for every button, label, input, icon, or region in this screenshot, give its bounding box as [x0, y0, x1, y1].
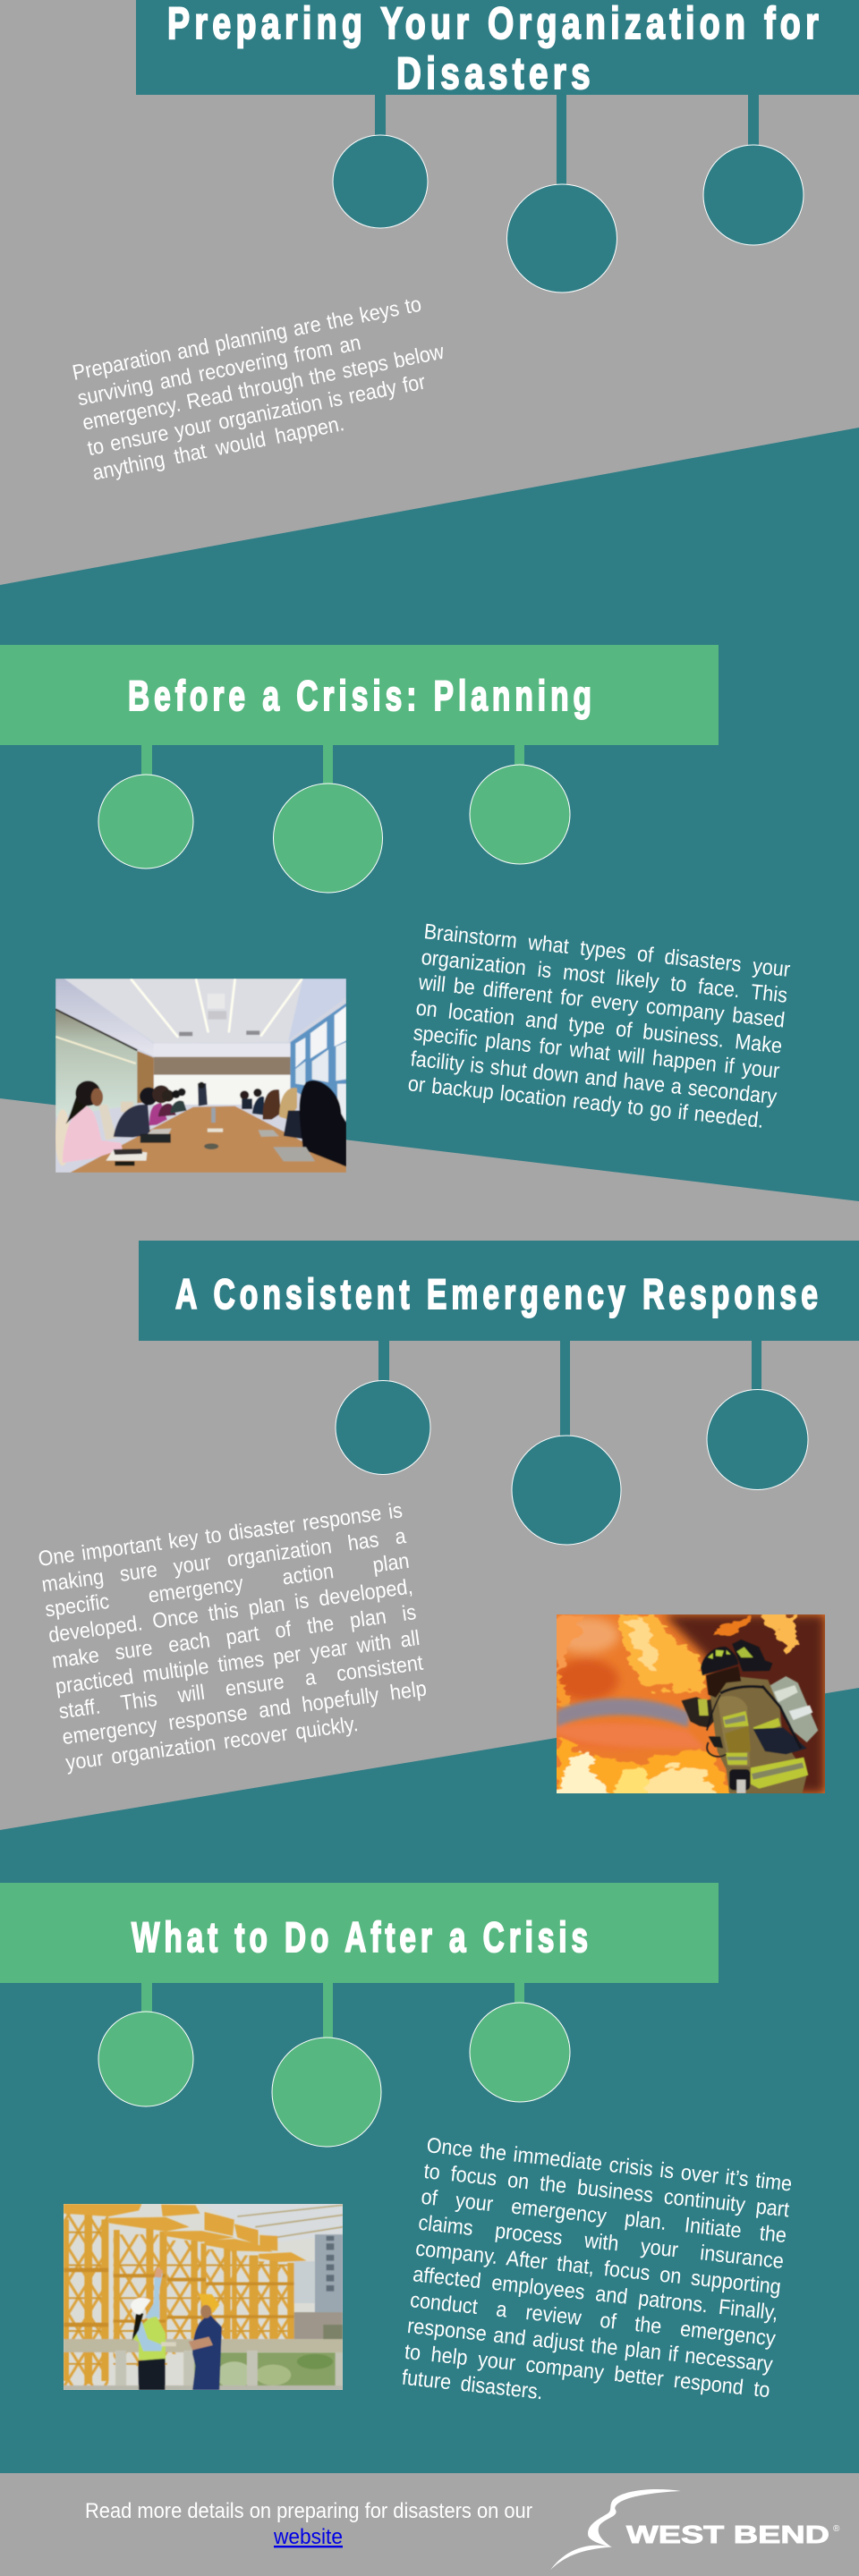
text: to focus on the business continuity part	[422, 2159, 790, 2222]
section: title banner	[136, 0, 859, 292]
text: make sure each part of the plan is	[50, 1600, 418, 1674]
text: conduct a review of the emergency	[409, 2288, 777, 2351]
text: or backup location ready to go if needed.	[407, 1072, 765, 1133]
hanging circles	[336, 1341, 808, 1545]
text: Preparation and planning are the keys to	[71, 292, 423, 386]
hanging circles	[98, 1983, 570, 2147]
text: surviving and recovering from an	[75, 330, 363, 411]
text: will be different for every company based	[418, 970, 786, 1033]
text block: after a crisis	[401, 2133, 793, 2404]
section: before a crisis banner	[0, 645, 719, 893]
text: anything that would happen.	[90, 411, 346, 486]
section: consistent response banner	[139, 1241, 859, 1545]
text: response and adjust the plan if necessary	[406, 2314, 774, 2377]
photo: construction workers at scaffolding	[64, 2204, 343, 2390]
text: specific plans for what will happen if your	[412, 1021, 780, 1083]
logo wordmark: WEST BEND	[626, 2521, 829, 2548]
text: making sure your organization has a	[40, 1524, 407, 1597]
text block: consistent response	[37, 1498, 428, 1775]
text: Once the immediate crisis is over it’s time	[425, 2133, 793, 2197]
text: emergency response and hopefully help	[61, 1676, 428, 1750]
text: affected employees and patrons. Finally,	[412, 2262, 779, 2326]
footer text: Read more details on preparing for disasters on our	[85, 2499, 532, 2523]
heading: main title line 2: Disasters	[396, 48, 595, 98]
text: emergency. Read through the steps below	[81, 340, 446, 436]
footer band	[0, 2473, 859, 2576]
text: on location and type of business. Make	[415, 996, 783, 1058]
footer link: website	[273, 2525, 343, 2549]
heading: after a crisis: What to Do After a Crisis	[132, 1913, 592, 1961]
text: your organization recover quickly.	[64, 1712, 360, 1775]
heading: before a crisis: Before a Crisis: Planning	[128, 672, 596, 719]
text: developed. Once this plan is developed,	[47, 1575, 414, 1648]
text: to ensure your organization is ready for	[85, 369, 428, 461]
text: staff. This will ensure a consistent	[57, 1651, 424, 1724]
hanging circles	[333, 95, 804, 292]
text: facility is shut down and have a secondary	[410, 1046, 778, 1109]
text: One important key to disaster response is	[37, 1498, 404, 1572]
section: after a crisis banner	[0, 1883, 719, 2147]
photo: conference room meeting	[55, 979, 346, 1173]
registered mark: ®	[833, 2524, 840, 2534]
text: company. After that, focus on supporting	[414, 2236, 782, 2300]
hanging circles	[98, 745, 570, 893]
text block: intro	[71, 292, 446, 486]
text: Brainstorm what types of disasters your	[422, 919, 791, 982]
text: to help your company better respond to	[404, 2340, 771, 2402]
text: claims process with your insurance	[417, 2211, 785, 2274]
text: specific emergency action plan	[44, 1549, 411, 1623]
text: organization is most likely to face. This	[420, 945, 788, 1007]
logo: West Bend	[550, 2489, 840, 2570]
text: of your emergency plan. Initiate the	[420, 2185, 787, 2248]
text: future disasters.	[401, 2366, 544, 2404]
icon: swoosh	[550, 2489, 681, 2570]
text: practiced multiple times per year with all	[54, 1625, 421, 1699]
photo: firefighters spraying flames	[557, 1614, 825, 1793]
text block: before a crisis	[407, 919, 791, 1133]
